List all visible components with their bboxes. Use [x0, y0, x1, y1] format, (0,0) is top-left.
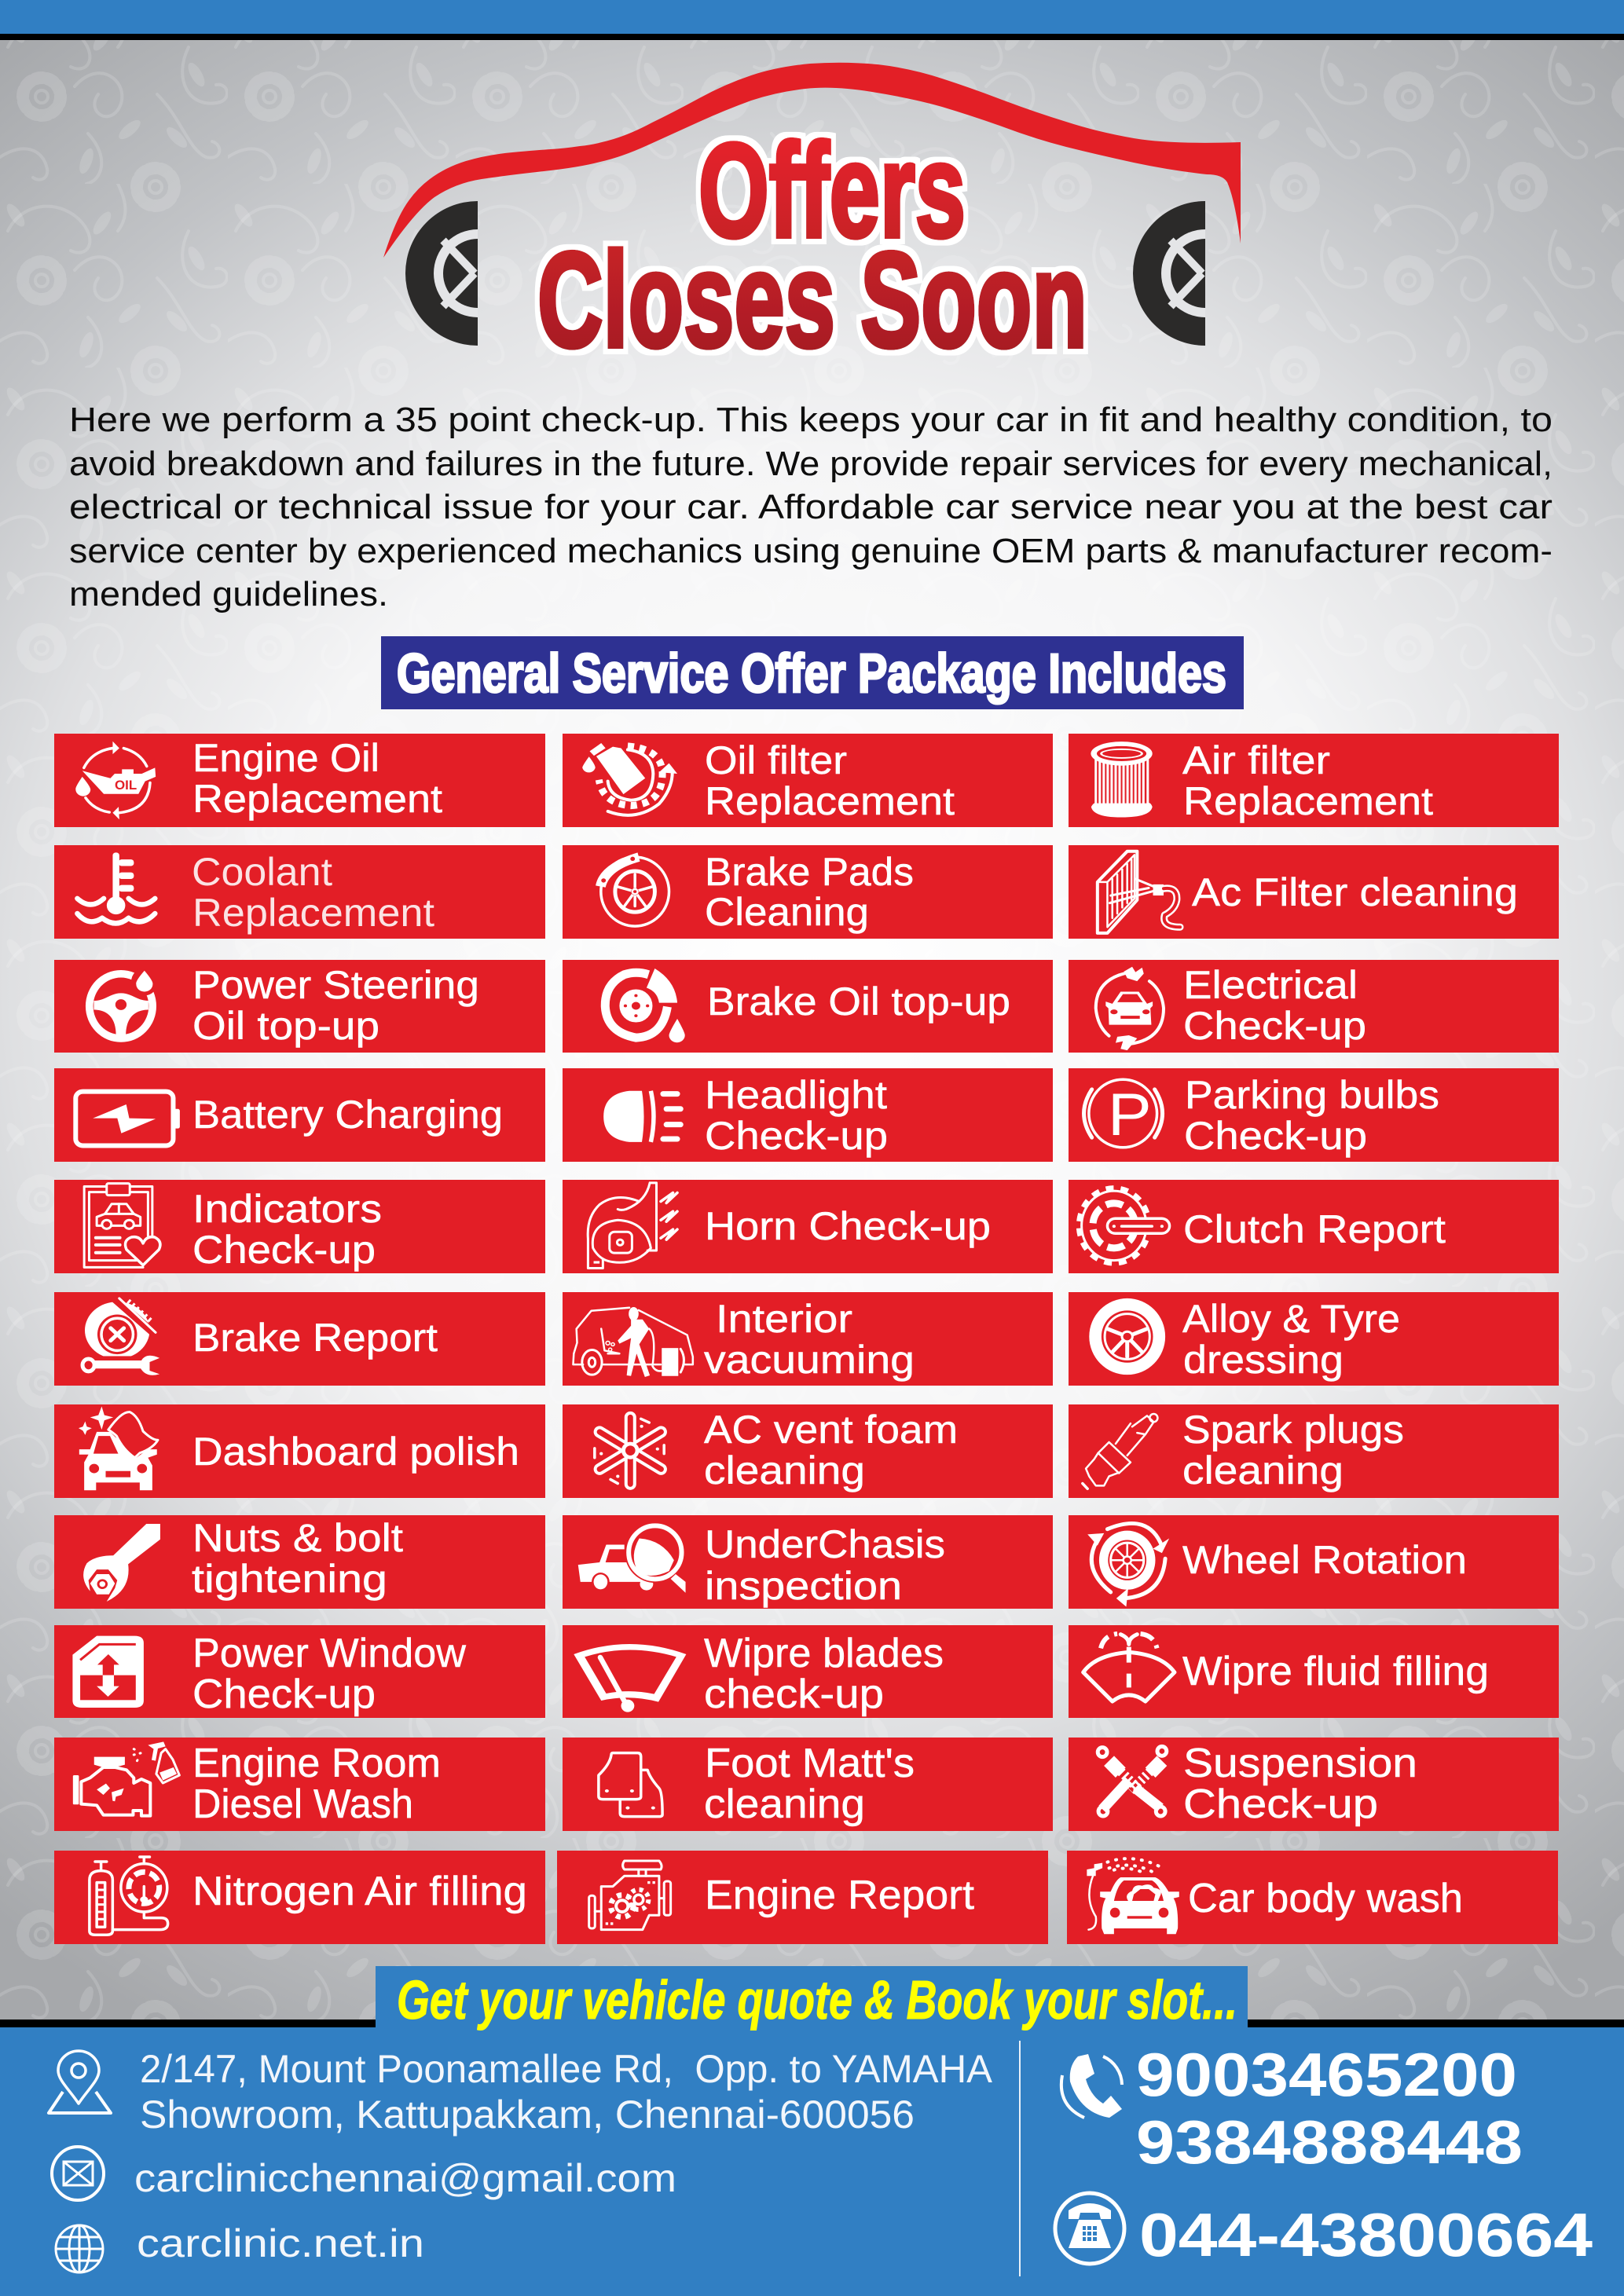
label: Headlight	[705, 1073, 887, 1117]
label	[192, 1631, 466, 1717]
icon: wiper fluid	[1083, 1634, 1175, 1701]
label	[705, 1073, 888, 1158]
intro paragraph: electrical or technical issue for your car. Affordable car service near you at the best car	[69, 488, 1553, 526]
divider	[1019, 2041, 1021, 2276]
panel: Electrical Check-up	[1069, 960, 1559, 1053]
heading: Closes Soon: Closes Soon	[537, 225, 1087, 375]
icon: interior vacuum	[573, 1307, 693, 1377]
label: Clutch Report	[1183, 1207, 1446, 1251]
icon: engine oil	[75, 742, 156, 819]
label: Check-up	[705, 1114, 888, 1158]
label: Nitrogen Air filling	[192, 1869, 527, 1914]
icon: ac filter	[1098, 851, 1180, 933]
icon: brake and wrench	[80, 1296, 163, 1376]
address: Showroom, Kattupakkam, Chennai-600056	[140, 2093, 915, 2137]
icon: parking	[1084, 1079, 1163, 1148]
panel: Spark plugs cleaning	[1069, 1404, 1559, 1498]
label	[704, 1408, 958, 1492]
icon: coolant	[77, 852, 155, 923]
icon: location pin	[49, 2051, 111, 2113]
label: Power Window	[192, 1631, 466, 1676]
label: Electrical	[1183, 963, 1358, 1007]
icon: clutch	[1079, 1188, 1170, 1264]
section heading: General Service Offer Package Includes: General Service Offer Package Includes	[397, 643, 1226, 704]
icon: wiper blade	[574, 1644, 686, 1712]
label: Car body wash	[1188, 1876, 1463, 1921]
panel: AC vent foam cleaning	[563, 1404, 1053, 1498]
label: Check-up	[192, 1672, 376, 1717]
label: UnderChasis	[705, 1522, 945, 1566]
icon: email	[52, 2147, 104, 2200]
label	[1182, 738, 1433, 823]
icon: engine oil: OIL	[115, 778, 137, 793]
label: Interior	[716, 1297, 852, 1341]
icon: steering wheel	[86, 968, 158, 1042]
panel: Ac Filter cleaning	[1069, 845, 1559, 939]
label: Ac Filter cleaning	[1192, 870, 1518, 914]
label	[192, 963, 479, 1048]
label: Coolant	[192, 850, 332, 894]
icon: foot mats	[599, 1753, 662, 1817]
icon: spark plug	[1083, 1414, 1157, 1489]
panel: Brake Oil top-up	[563, 960, 1053, 1053]
label	[1182, 1297, 1400, 1382]
icon: suspension shocks	[1098, 1746, 1167, 1816]
panel: Wipre blades check-up	[563, 1625, 1053, 1718]
label: cleaning	[1182, 1448, 1344, 1492]
label: check-up	[704, 1672, 884, 1717]
icon: left wheel	[405, 201, 478, 346]
mobile numbers: 9003465200	[1136, 2040, 1517, 2109]
icon: headlight	[603, 1091, 680, 1142]
label	[705, 738, 955, 823]
panel: Nuts & bolt tightening	[54, 1515, 545, 1609]
icon: parking: P	[1108, 1082, 1152, 1148]
panel: Coolant Replacement	[54, 845, 545, 939]
panel: Wipre fluid filling	[1069, 1625, 1559, 1718]
label: Horn Check-up	[705, 1204, 991, 1248]
panel: Nitrogen Air filling	[54, 1851, 545, 1944]
label: Cleaning	[705, 890, 869, 934]
landline number: 044-43800664	[1139, 2200, 1593, 2269]
label: Diesel Wash	[192, 1782, 413, 1827]
icon: globe	[56, 2225, 103, 2272]
label	[705, 850, 914, 934]
label: Indicators	[192, 1187, 382, 1231]
label: Check-up	[192, 1228, 376, 1272]
icon: ac vent fan	[595, 1417, 664, 1484]
icon: oil filter	[582, 743, 677, 815]
label	[704, 1297, 915, 1382]
icon: engine with spray bottle	[73, 1741, 179, 1816]
icon: engine with gears	[589, 1861, 671, 1930]
label: Check-up	[1184, 1114, 1367, 1158]
label: Brake Oil top-up	[707, 980, 1010, 1023]
label	[1182, 1408, 1404, 1492]
label: Dashboard polish	[192, 1430, 519, 1474]
panel: Engine Room Diesel Wash	[54, 1738, 545, 1831]
label	[1183, 963, 1366, 1048]
panel: Air filter Replacement	[1069, 734, 1559, 827]
label: Engine Room	[192, 1741, 441, 1786]
intro paragraph: service center by experienced mechanics using genuine OEM parts & manufacturer recom-	[69, 532, 1553, 570]
icon: horn	[588, 1183, 677, 1269]
website: carclinic.net.in	[137, 2221, 424, 2265]
label: Brake Pads	[705, 850, 914, 894]
label	[192, 1741, 441, 1827]
label	[704, 1631, 944, 1717]
icon: brake pads	[596, 852, 669, 926]
panel: Foot Matt's cleaning	[563, 1738, 1053, 1831]
label: dressing	[1183, 1338, 1344, 1382]
panel: Parking bulbs Check-up	[1069, 1068, 1559, 1162]
label: Engine Oil	[192, 736, 379, 780]
panel: Dashboard polish	[54, 1404, 545, 1498]
panel: Oil filter Replacement	[563, 734, 1053, 827]
label: Wipre fluid filling	[1182, 1649, 1489, 1694]
mobile numbers: 9384888448	[1136, 2107, 1523, 2177]
label	[192, 736, 442, 821]
label	[705, 1522, 945, 1608]
panel: UnderChasis inspection	[563, 1515, 1053, 1609]
label: Wipre blades	[704, 1631, 944, 1676]
icon: battery	[75, 1092, 180, 1145]
address	[140, 2047, 993, 2137]
panel: Battery Charging	[54, 1068, 545, 1162]
label: cleaning	[704, 1448, 865, 1492]
panel: Power Steering Oil top-up	[54, 960, 545, 1053]
icon: brake disc with oil drop	[605, 969, 685, 1042]
label: Spark plugs	[1182, 1408, 1404, 1452]
panel: Horn Check-up	[563, 1180, 1053, 1273]
icon: air filter	[1091, 742, 1153, 818]
icon: car wash	[1087, 1858, 1179, 1934]
label: Replacement	[705, 779, 955, 823]
panel: Power Window Check-up	[54, 1625, 545, 1718]
label: Engine Report	[705, 1873, 975, 1918]
icon: clipboard with car	[84, 1184, 160, 1267]
icon: alloy wheel	[1089, 1298, 1165, 1375]
label: Oil top-up	[192, 1004, 379, 1048]
panel: Engine Report	[557, 1851, 1048, 1944]
section heading: General Service Offer Package Includes	[381, 636, 1244, 709]
label: Oil filter	[705, 738, 847, 782]
label	[192, 1187, 382, 1272]
label: Wheel Rotation	[1182, 1538, 1467, 1582]
label: Battery Charging	[192, 1093, 503, 1137]
mobile numbers	[1136, 2040, 1523, 2177]
label: vacuuming	[704, 1338, 915, 1382]
icon: car with wrenches	[1096, 967, 1164, 1050]
footer panel	[0, 1966, 1624, 2296]
icon: car with sparkles	[79, 1407, 158, 1490]
panel: Brake Pads Cleaning	[563, 845, 1053, 939]
panel: Indicators Check-up	[54, 1180, 545, 1273]
label: inspection	[705, 1564, 902, 1608]
label: Replacement	[192, 891, 434, 935]
label	[192, 1516, 403, 1601]
top bar	[0, 0, 1624, 40]
label	[1184, 1073, 1439, 1158]
panel: Suspension Check-up	[1069, 1738, 1559, 1831]
label: Suspension	[1183, 1741, 1417, 1786]
title: car logo with Offers Closes Soon	[383, 63, 1241, 355]
car roof swoosh	[383, 63, 1241, 258]
panel: Engine Oil Replacement	[54, 734, 545, 827]
label: Nuts & bolt	[192, 1516, 403, 1560]
intro paragraph: avoid breakdown and failures in the future. We provide repair services for every mechanical,	[69, 445, 1553, 483]
label	[704, 1741, 915, 1827]
icon: wheel rotation	[1087, 1523, 1169, 1607]
label: Alloy & Tyre	[1182, 1297, 1400, 1341]
address: 2/147, Mount Poonamallee Rd, Opp. to YAMAHA	[140, 2047, 993, 2091]
intro paragraph	[69, 401, 1553, 613]
label: AC vent foam	[704, 1408, 958, 1452]
call to action: Get your vehicle quote & Book your slot...	[397, 1969, 1237, 2031]
icon: right wheel	[1133, 201, 1205, 346]
intro paragraph: mended guidelines.	[69, 575, 388, 613]
label: cleaning	[704, 1782, 865, 1827]
icon: power window	[72, 1636, 144, 1708]
panel: Brake Report	[54, 1292, 545, 1386]
label: Check-up	[1183, 1782, 1378, 1827]
label: Check-up	[1183, 1004, 1366, 1048]
label: Brake Report	[192, 1316, 438, 1360]
label: Power Steering	[192, 963, 479, 1007]
label: Air filter	[1182, 738, 1330, 782]
icon: nitrogen cylinder and gauge	[90, 1857, 168, 1935]
label	[192, 850, 434, 935]
label: Parking bulbs	[1185, 1073, 1439, 1117]
icon: desk telephone	[1055, 2193, 1124, 2264]
label	[1183, 1741, 1417, 1827]
intro paragraph: Here we perform a 35 point check-up. This keeps your car in fit and healthy condition, to	[69, 401, 1553, 439]
label: tightening	[192, 1557, 387, 1601]
icon: wrench and nut	[83, 1524, 160, 1602]
email address: carclinicchennai@gmail.com	[134, 2156, 676, 2200]
panel: Clutch Report	[1069, 1180, 1559, 1273]
heading: Offers: Offers	[698, 116, 966, 265]
label: Replacement	[192, 777, 442, 821]
icon: truck with magnifier	[578, 1522, 686, 1593]
panel: Car body wash	[1067, 1851, 1558, 1944]
label: Replacement	[1183, 779, 1433, 823]
icon: mobile handset	[1061, 2054, 1122, 2118]
panel: Wheel Rotation	[1069, 1515, 1559, 1609]
panel: Headlight Check-up	[563, 1068, 1053, 1162]
panel: Alloy & Tyre dressing	[1069, 1292, 1559, 1386]
label: Foot Matt's	[705, 1741, 915, 1786]
panel: Interior vacuuming	[563, 1292, 1053, 1386]
